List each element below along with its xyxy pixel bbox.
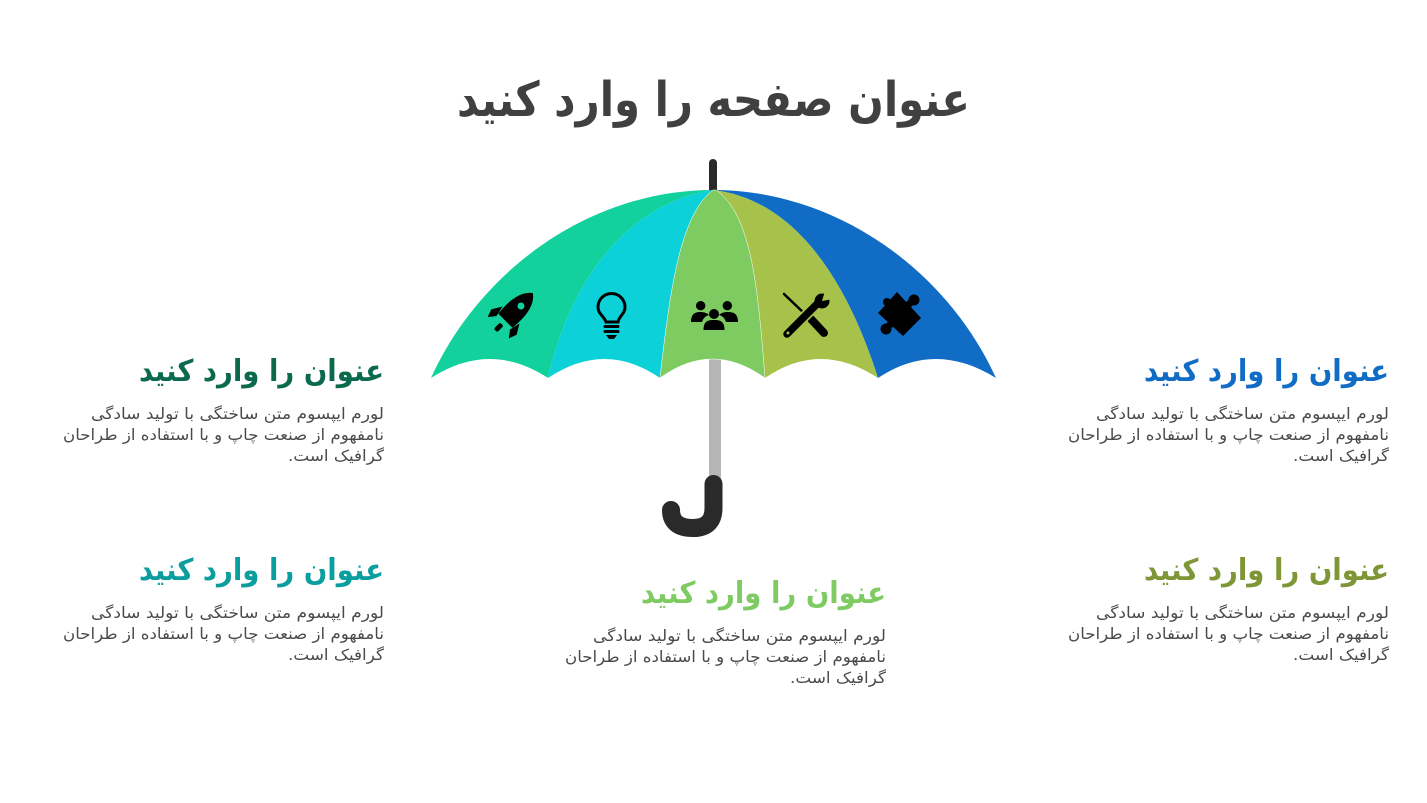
umbrella shaft xyxy=(709,350,721,485)
panel: cyan canopy segment xyxy=(548,190,713,378)
body text: گرافیک است. xyxy=(288,447,385,465)
umbrella top spike xyxy=(709,159,717,195)
body text: گرافیک است. xyxy=(1293,447,1390,465)
icon: group of people xyxy=(691,301,738,330)
umbrella handle xyxy=(671,484,714,528)
text block: cyan column bottom xyxy=(63,553,385,664)
panel: lime canopy segment xyxy=(713,190,878,378)
body text: نامفهوم از صنعت چاپ و با استفاده از طراحان xyxy=(565,648,886,667)
text block: green center xyxy=(565,576,887,687)
body text xyxy=(1068,604,1390,664)
heading: عنوان را وارد کنید xyxy=(139,354,384,389)
icon: puzzle piece xyxy=(878,292,921,336)
text block: olive column bottom xyxy=(1068,553,1390,664)
icon: light bulb xyxy=(598,294,625,339)
body text: نامفهوم از صنعت چاپ و با استفاده از طراحان xyxy=(63,426,384,445)
body text: نامفهوم از صنعت چاپ و با استفاده از طراحان xyxy=(63,625,384,644)
body text xyxy=(63,405,385,465)
body text: نامفهوم از صنعت چاپ و با استفاده از طراحان xyxy=(1068,625,1389,644)
body text xyxy=(565,627,887,687)
heading: عنوان را وارد کنید xyxy=(139,553,384,588)
heading: عنوان را وارد کنید xyxy=(1144,354,1389,389)
body text: گرافیک است. xyxy=(1293,646,1390,664)
panel: blue canopy segment xyxy=(713,190,996,378)
body text xyxy=(1068,405,1390,465)
panel: teal canopy segment xyxy=(431,190,713,378)
body text: لورم ایپسوم متن ساختگی با تولید سادگی xyxy=(91,604,384,623)
heading: عنوان را وارد کنید xyxy=(1144,553,1389,588)
umbrella xyxy=(431,159,996,528)
panel: green canopy segment xyxy=(660,190,765,378)
body text: لورم ایپسوم متن ساختگی با تولید سادگی xyxy=(593,627,886,646)
icon: crossed tools xyxy=(784,291,833,334)
body text: گرافیک است. xyxy=(790,669,887,687)
title: عنوان صفحه را وارد کنید xyxy=(457,72,970,128)
body text xyxy=(63,604,385,664)
text block: blue column top xyxy=(1068,354,1390,465)
body text: لورم ایپسوم متن ساختگی با تولید سادگی xyxy=(1096,405,1389,424)
text block: teal column top xyxy=(63,354,385,465)
icon: rocket xyxy=(483,280,546,343)
body text: نامفهوم از صنعت چاپ و با استفاده از طراحان xyxy=(1068,426,1389,445)
body text: لورم ایپسوم متن ساختگی با تولید سادگی xyxy=(91,405,384,424)
body text: گرافیک است. xyxy=(288,646,385,664)
heading: عنوان را وارد کنید xyxy=(641,576,886,611)
body text: لورم ایپسوم متن ساختگی با تولید سادگی xyxy=(1096,604,1389,623)
